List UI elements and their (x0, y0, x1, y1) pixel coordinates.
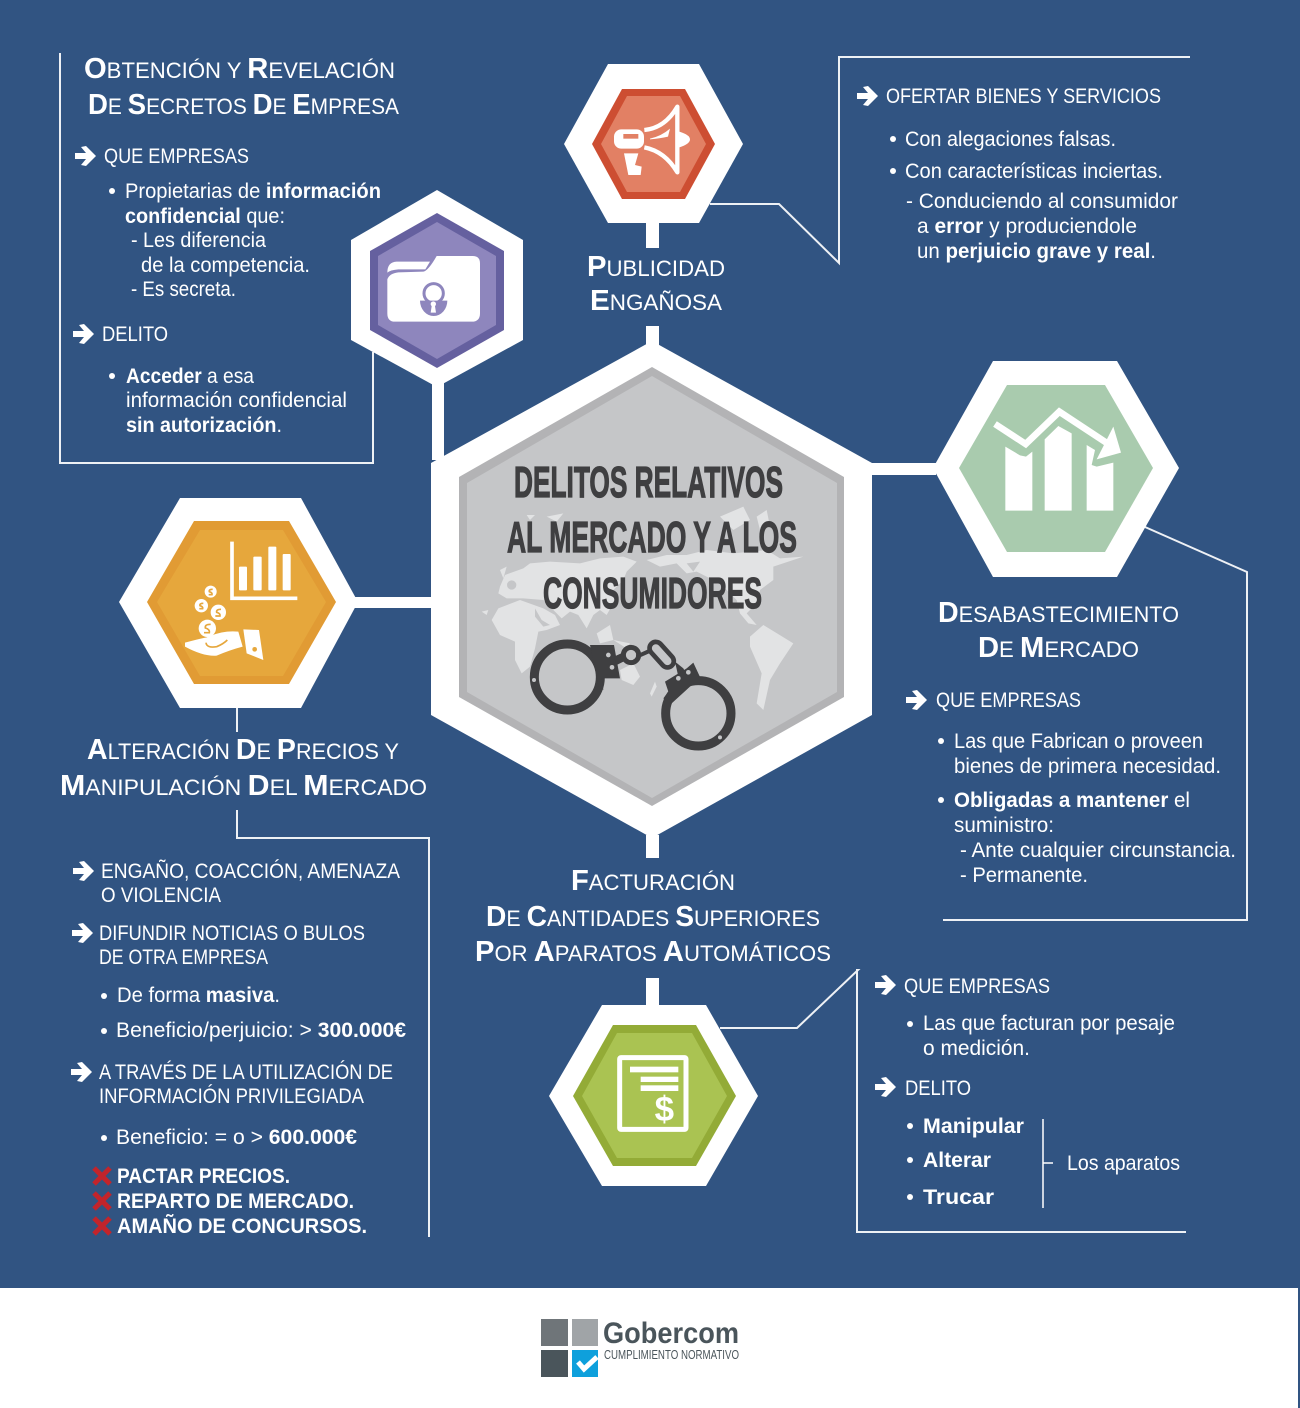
text block: pesaje: Las que facturan por pesaje (923, 1012, 1175, 1035)
heading: alteración (60, 734, 427, 802)
heading: obtención: OBTENCIÓN Y REVELACIÓN (84, 53, 395, 85)
text block: engaño: O VIOLENCIA (101, 884, 221, 907)
icon: arrow (875, 975, 896, 995)
heading: publicidad: ENGAÑOSA (590, 285, 722, 317)
text block: propietarias: - Es secreta. (131, 278, 236, 301)
text block: alegaciones: a error y produciendole (917, 215, 1137, 238)
text block: propietarias: Propietarias de información (125, 180, 381, 203)
central title (507, 458, 797, 618)
subheading: delito: DELITO (102, 323, 168, 346)
outline frames (60, 53, 1247, 1237)
panel: facturación (475, 865, 1180, 1209)
text block: información privilegiada: Beneficio: = o > 600.000€ (116, 1126, 357, 1149)
icon: arrow (73, 324, 94, 344)
panel: obtención y revelación (73, 53, 399, 437)
icon: invoice (620, 1058, 686, 1129)
icon: arrow (857, 86, 878, 106)
heading: facturación (475, 865, 831, 968)
central hexagon (431, 341, 872, 838)
heading: facturación: FACTURACIÓN (571, 865, 735, 897)
icon: arrow (906, 690, 927, 710)
text block: primera necesidad (938, 730, 1236, 887)
icon: arrow (72, 923, 93, 943)
list: manipular alterar trucar: Manipular (923, 1115, 1024, 1138)
heading: desabastecimiento: DESABASTECIMIENTO (938, 597, 1179, 629)
text block: información privilegiada: INFORMACIÓN PRIVILEGIADA (99, 1085, 364, 1108)
hexagon: purple folder (351, 190, 523, 387)
text block: primera necesidad: - Ante cualquier circunstancia. (960, 839, 1236, 862)
text block: primera necesidad: - Permanente. (960, 864, 1088, 887)
icon: handcuffs (532, 639, 731, 746)
text block: alegaciones: Con alegaciones falsas. (905, 128, 1116, 151)
icon: megaphone (614, 107, 690, 175)
hexagon: green market (933, 361, 1179, 577)
text block: primera necesidad: suministro: (954, 814, 1054, 837)
subheading: delito: DELITO (905, 1077, 971, 1100)
footer logo (541, 1317, 739, 1377)
central title: DELITOS RELATIVOS (514, 458, 783, 507)
text block: alegaciones (890, 128, 1178, 263)
list: prohibited conduct: PACTAR PRECIOS. (117, 1165, 290, 1188)
central title: AL MERCADO Y A LOS (507, 513, 797, 562)
list: manipular alterar trucar: Trucar (923, 1186, 994, 1209)
subheading: que empresas: QUE EMPRESAS (104, 145, 249, 168)
heading: alteración: ALTERACIÓN DE PRECIOS Y (87, 734, 399, 766)
text block: primera necesidad: Las que Fabrican o proveen (954, 730, 1203, 753)
footer band (0, 1288, 1298, 1408)
heading: obtención: DE SECRETOS DE EMPRESA (88, 89, 399, 121)
text block: pesaje: o medición. (923, 1037, 1030, 1060)
text block: propietarias: confidencial que: (125, 205, 285, 228)
heading: publicidad: PUBLICIDAD (587, 251, 725, 283)
text block: información privilegiada (99, 1061, 393, 1149)
heading: facturación: DE CANTIDADES SUPERIORES (486, 901, 820, 933)
heading: obtención (84, 53, 399, 121)
heading: publicidad (587, 251, 725, 317)
subheading: que empresas: QUE EMPRESAS (936, 689, 1081, 712)
connector lines (354, 223, 936, 1006)
list: prohibited conduct: REPARTO DE MERCADO. (117, 1190, 354, 1213)
text: los aparatos: Los aparatos (1067, 1152, 1180, 1175)
hexagon: orange prices (119, 498, 358, 708)
footer logo: CUMPLIMIENTO NORMATIVO (604, 1347, 739, 1362)
footer logo: Gobercom (603, 1317, 739, 1350)
text block: acceder: Acceder a esa (126, 365, 254, 388)
text block: propietarias: de la competencia. (141, 254, 310, 277)
text block: alegaciones: Con características inciertas. (905, 160, 1163, 183)
text block: difundir: De forma masiva. (117, 984, 280, 1007)
heading: desabastecimiento (938, 597, 1179, 664)
list: manipular alterar trucar: Alterar (923, 1149, 991, 1172)
icon: arrow (71, 1062, 92, 1082)
icon: arrow (73, 861, 94, 881)
panel: alteración de precios (60, 734, 427, 1238)
icon: arrow (75, 146, 96, 166)
heading: desabastecimiento: DE MERCADO (978, 632, 1139, 664)
text block: difundir: Beneficio/perjuicio: > 300.000€ (116, 1019, 406, 1042)
bracket (1043, 1119, 1053, 1208)
panel: publicidad engañosa (587, 85, 1178, 317)
text block: engaño: ENGAÑO, COACCIÓN, AMENAZA (101, 859, 400, 883)
hexagon: green invoice (549, 1005, 758, 1186)
list: manipular alterar trucar (907, 1115, 1024, 1209)
subheading: ofertar: OFERTAR BIENES Y SERVICIOS (886, 85, 1161, 108)
text block: alegaciones: - Conduciendo al consumidor (906, 190, 1178, 213)
text block: propietarias (109, 180, 381, 301)
icon: hand with coins and bar chart (185, 542, 297, 660)
icon: invoice: $ (655, 1090, 674, 1129)
text block: primera necesidad: bienes de primera necesidad. (954, 755, 1221, 778)
icon: falling chart (995, 412, 1121, 511)
world map (482, 507, 803, 710)
heading: alteración: MANIPULACIÓN DEL MERCADO (60, 770, 427, 802)
text block: alegaciones: un perjuicio grave y real. (917, 240, 1156, 263)
text block: primera necesidad: Obligadas a mantener el (954, 789, 1190, 812)
icon: arrow (875, 1077, 896, 1097)
text block: acceder: información confidencial (126, 389, 347, 412)
text block: pesaje (907, 1012, 1175, 1060)
text block: engaño (101, 859, 400, 907)
list: prohibited conduct: AMAÑO DE CONCURSOS. (117, 1215, 367, 1238)
text block: propietarias: - Les diferencia (131, 229, 266, 252)
subheading: que empresas: QUE EMPRESAS (904, 975, 1050, 998)
central title: CONSUMIDORES (543, 569, 762, 618)
text block: acceder (109, 365, 347, 437)
text block: difundir: DIFUNDIR NOTICIAS O BULOS (99, 922, 365, 945)
panel: desabastecimiento (906, 597, 1236, 887)
icon: locked folder (387, 256, 480, 322)
text block: acceder: sin autorización. (126, 414, 282, 437)
text block: difundir: DE OTRA EMPRESA (99, 946, 268, 969)
hexagon: red megaphone (564, 64, 743, 223)
text block: difundir (99, 922, 406, 1042)
text block: información privilegiada: A TRAVÉS DE LA UTILIZACIÓN DE (99, 1061, 393, 1084)
heading: facturación: POR APARATOS AUTOMÁTICOS (475, 936, 831, 968)
list: prohibited conduct (94, 1165, 367, 1238)
